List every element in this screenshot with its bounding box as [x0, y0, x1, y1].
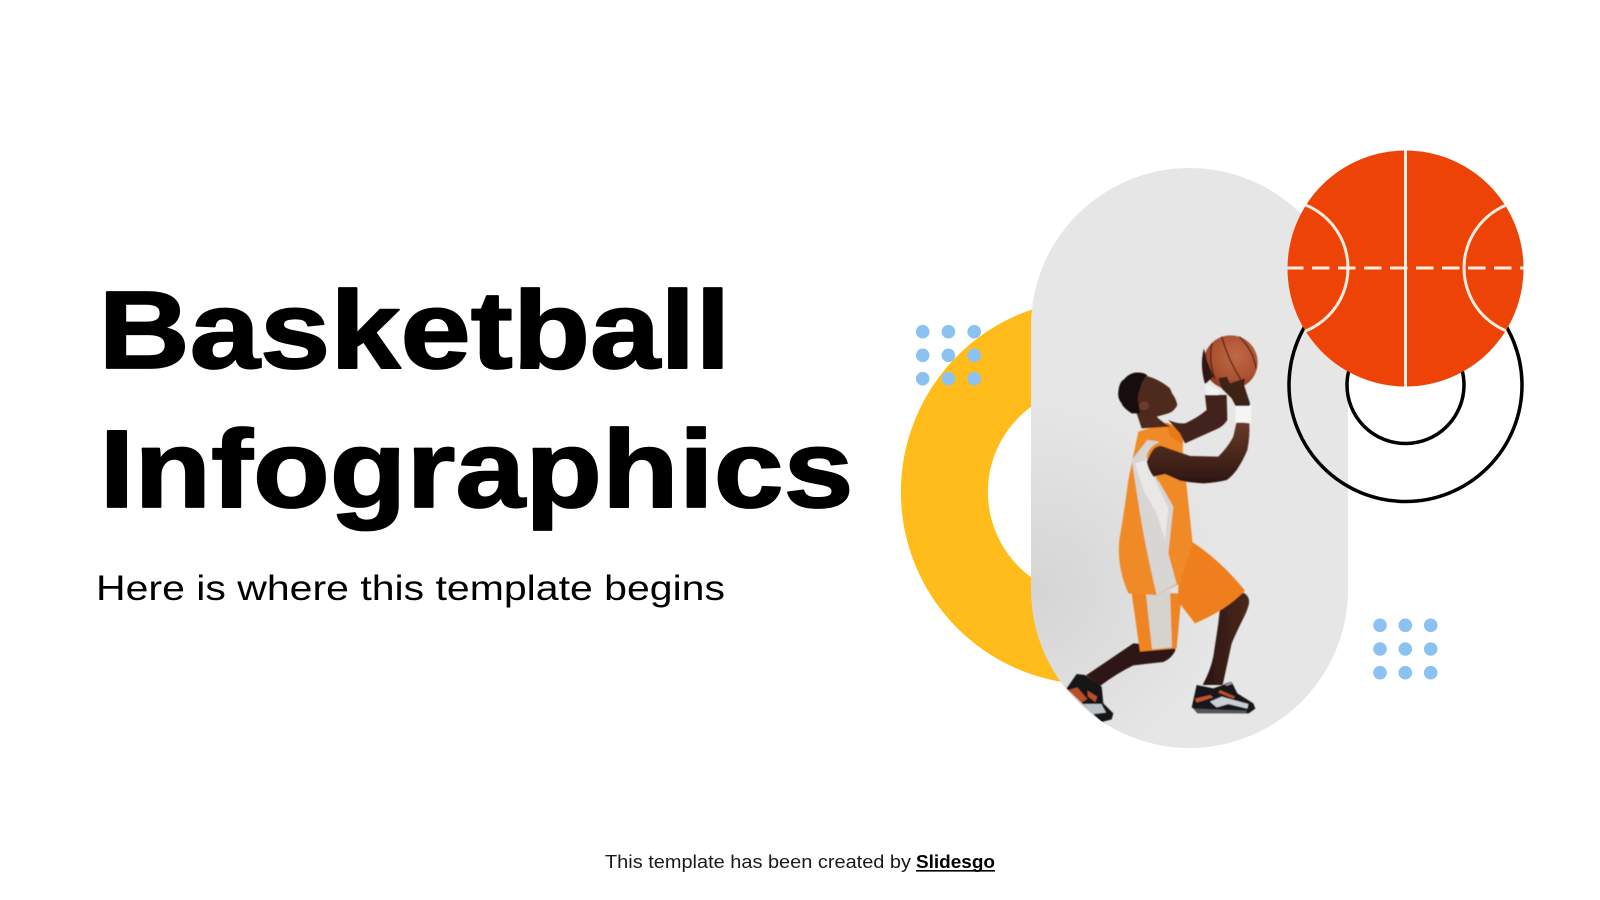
- jersey: [1119, 423, 1193, 595]
- dots: lower right: [1373, 618, 1437, 680]
- credit line: This template has been created by: [605, 852, 911, 872]
- head: [1118, 373, 1177, 428]
- player photo: [1067, 335, 1258, 722]
- rear wristband: [1205, 384, 1220, 395]
- large black circle: [1289, 268, 1522, 502]
- dots: upper left: [916, 325, 981, 386]
- title: [98, 269, 854, 531]
- credit line: Slidesgo: [916, 852, 995, 872]
- slide: [99, 150, 1524, 872]
- left shoe: [1067, 674, 1113, 722]
- yellow ring: [944, 343, 1242, 641]
- subtitle: Here is where this template begins: [96, 569, 725, 608]
- title: Basketball: [98, 269, 730, 392]
- front leg: [1203, 593, 1249, 685]
- title: Infographics: [100, 408, 854, 531]
- front wristband: [1235, 406, 1252, 423]
- rear leg: [1086, 643, 1175, 686]
- small black circle: [1347, 326, 1464, 444]
- hand: [1218, 377, 1250, 406]
- rear arm: [1168, 395, 1227, 443]
- shorts: [1132, 542, 1245, 652]
- right shoe: [1192, 681, 1255, 713]
- basketball court circle: [1288, 150, 1524, 386]
- front arm: [1147, 422, 1249, 483]
- grey arch panel: [1031, 168, 1348, 748]
- basketball: [1202, 335, 1258, 389]
